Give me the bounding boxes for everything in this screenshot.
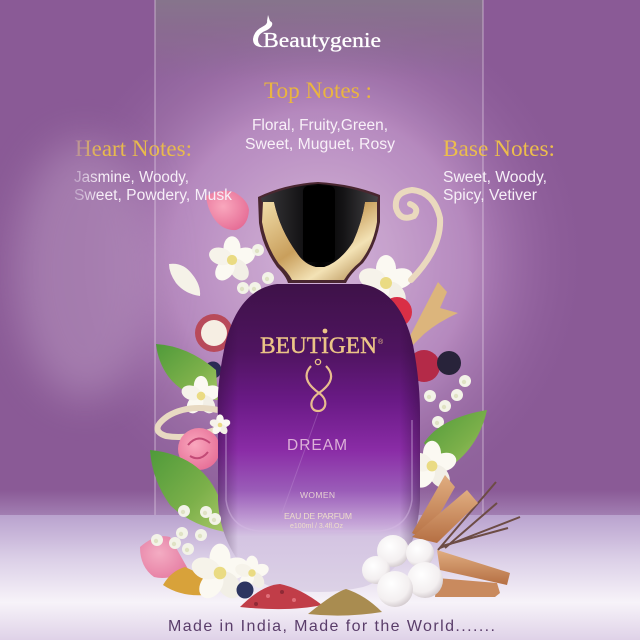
paw emblem (323, 329, 327, 333)
top notes list (245, 117, 395, 153)
small jasmine (234, 556, 270, 591)
base notes (443, 136, 555, 204)
eau de parfum label: EAU DE PARFUM (284, 511, 352, 521)
product name: DREAM (287, 437, 347, 454)
turmeric (163, 567, 207, 595)
women label: WOMEN (300, 490, 335, 500)
perfume bottle (218, 182, 420, 592)
pink petal (140, 536, 188, 578)
base notes list (443, 169, 547, 204)
left green leaf (156, 344, 218, 400)
blueberry (236, 582, 254, 598)
jasmine right (356, 255, 416, 312)
red berry (408, 350, 440, 382)
floor (0, 515, 640, 640)
cream swirl (396, 190, 440, 280)
bottle cap (258, 182, 380, 283)
muguet buds (151, 505, 221, 555)
large left leaf (150, 450, 225, 532)
logo: Beautygenie (253, 15, 381, 52)
blueberry (204, 362, 222, 378)
top notes list: Floral, Fruity,Green, (252, 117, 388, 134)
base notes list: Sweet, Woody, (443, 169, 547, 186)
heading: top notes: Top Notes : (264, 78, 372, 103)
raspberry (382, 297, 412, 327)
base notes list: Spicy, Vetiver (443, 187, 537, 204)
heading: heart notes: Heart Notes: (75, 136, 192, 161)
blackberry (437, 351, 461, 375)
icon: genie lamp (253, 15, 272, 47)
vetiver sticks (438, 482, 520, 550)
heart notes list (74, 169, 232, 204)
top notes (245, 78, 395, 153)
heart notes list: Jasmine, Woody, (74, 169, 189, 186)
heart notes list: Sweet, Powdery, Musk (74, 187, 232, 204)
infinity emblem (307, 366, 331, 411)
pink peppercorn pile (240, 584, 322, 609)
glass panel (155, 0, 483, 520)
small blossom (209, 414, 231, 436)
spice powder pile (308, 589, 382, 616)
rose petal (206, 191, 249, 230)
registered mark: ® (378, 338, 384, 346)
foreground botanicals (140, 414, 520, 616)
heart notes (74, 136, 232, 204)
sandalwood sticks (412, 475, 510, 597)
right green leaf (424, 410, 487, 470)
large jasmine (189, 544, 251, 603)
gold cream (410, 282, 458, 346)
cotton bolls (362, 535, 443, 607)
muguet buds (237, 244, 274, 294)
right buds (424, 375, 471, 428)
paw emblem small (315, 359, 321, 365)
white petal (169, 264, 200, 296)
jasmine left (207, 236, 257, 284)
heading: base notes: Base Notes: (443, 136, 555, 161)
lychee (195, 314, 233, 352)
brand name: BEUTIGEN (260, 333, 377, 358)
top notes list: Sweet, Muguet, Rosy (245, 136, 395, 153)
botanical decoration behind bottle (150, 190, 487, 532)
pink rose (178, 428, 220, 470)
tagline: Made in India, Made for the World....... (168, 618, 495, 635)
left swirl (157, 408, 220, 437)
brand name: Beautygenie (263, 28, 381, 52)
volume label: e100ml / 3.4fl.Oz (290, 523, 344, 530)
jasmine left mid (180, 376, 222, 417)
jasmine right low (405, 441, 459, 492)
bottle body (218, 284, 420, 592)
